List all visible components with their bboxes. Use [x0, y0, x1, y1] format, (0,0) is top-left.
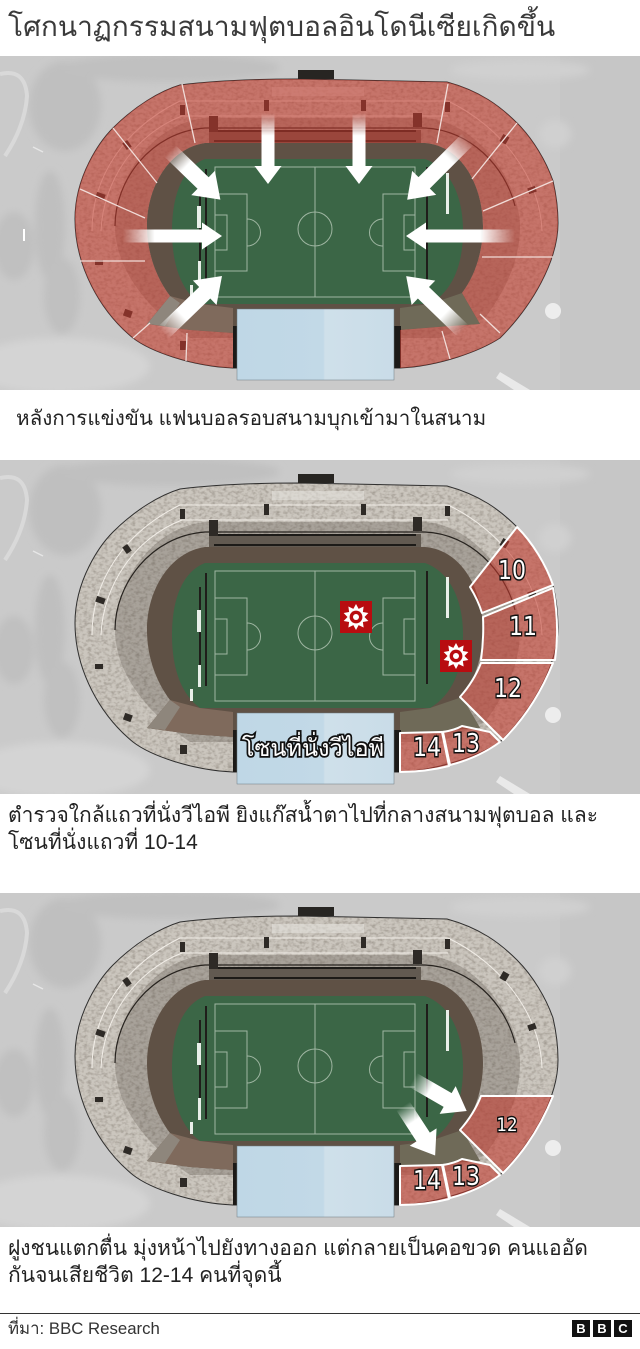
BBC logo: C	[618, 1321, 628, 1336]
caption 3: ฝูงชนแตกตื่น มุ่งหน้าไปยังทางออก แต่กลายเป็นคอขวด คนแออัด	[8, 1237, 588, 1260]
section numbers	[413, 556, 537, 763]
footer rule	[0, 1313, 640, 1314]
icon: tear gas explosion, near stand	[440, 640, 472, 672]
red overlay: all stands	[75, 79, 558, 368]
arrow: left side	[123, 222, 222, 250]
BBC logo: B	[597, 1321, 607, 1336]
caption 3	[8, 1234, 588, 1288]
panel: tear gas fired	[0, 458, 640, 798]
panel: fans invade pitch	[0, 54, 640, 394]
caption 1: หลังการแข่งขัน แฟนบอลรอบสนามบุกเข้ามาในสนาม	[16, 407, 486, 430]
BBC logo	[572, 1320, 632, 1337]
arrow: upper left diagonal	[166, 146, 220, 200]
stadium photo	[0, 54, 640, 394]
stadium photo	[0, 458, 640, 798]
section numbers: 14	[413, 1166, 441, 1196]
source: ที่มา: BBC Research	[8, 1319, 160, 1338]
section numbers: 12	[494, 674, 522, 704]
caption 3: กันจนเสียชีวิต 12-14 คนที่จุดนี้	[8, 1264, 282, 1287]
arrows: crowd moving onto pitch	[123, 113, 515, 345]
arrow: toward section 13-14	[397, 1102, 437, 1156]
stadium photo	[0, 891, 640, 1231]
arrow: top left down	[254, 113, 282, 184]
stand section dividers	[80, 84, 553, 361]
VIP zone label: โซนที่นั่งวีไอพี	[242, 731, 384, 761]
section numbers: 13	[452, 1162, 480, 1192]
arrow: toward section 12	[410, 1074, 467, 1114]
section numbers: 10	[498, 556, 526, 586]
section numbers: 13	[452, 729, 480, 759]
icon: tear gas explosion, centre pitch	[340, 601, 372, 633]
arrow: upper right diagonal	[407, 134, 472, 200]
white tick	[23, 229, 25, 241]
seating sections 10-14	[400, 527, 557, 772]
arrow: top right down	[346, 113, 372, 184]
caption 2: โซนที่นั่งแถวที่ 10-14	[8, 831, 198, 854]
caption 2: ตำรวจใกล้แถวที่นั่งวีไอพี ยิงแก๊สน้ำตาไปที่กลางสนามฟุตบอล และ	[8, 804, 598, 827]
section numbers	[413, 1114, 518, 1196]
BBC logo: B	[576, 1321, 586, 1336]
caption 2	[8, 800, 598, 854]
title: โศกนาฏกรรมสนามฟุตบอลอินโดนีเซียเกิดขึ้น	[8, 11, 555, 42]
panel: crush at exits	[0, 891, 640, 1231]
section numbers: 14	[413, 733, 441, 763]
arrow: lower left diagonal	[159, 276, 222, 338]
arrow: right side	[406, 222, 515, 250]
section numbers: 11	[509, 612, 537, 642]
section numbers: 12	[496, 1114, 518, 1136]
seating sections 12-14	[400, 1096, 553, 1205]
arrow: lower right diagonal	[406, 276, 468, 336]
arrows: crowd toward exits	[397, 1074, 467, 1156]
